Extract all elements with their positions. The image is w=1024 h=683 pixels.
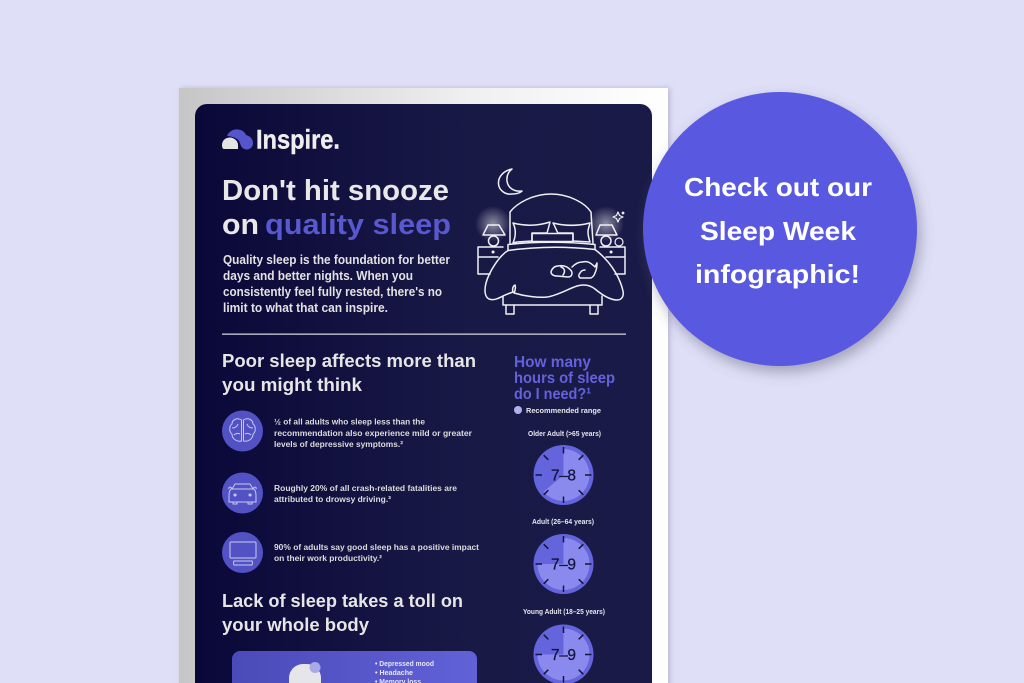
right pillow (553, 223, 590, 242)
divider (222, 334, 626, 335)
stat text: attributed to drowsy driving.³ (274, 494, 391, 504)
lamp glow left (475, 206, 511, 242)
icon: car (222, 472, 263, 514)
legend: Recommended range (526, 406, 601, 415)
clock: young adult: 7–9 (551, 647, 576, 664)
callout circle (643, 92, 917, 366)
car headlights (235, 494, 250, 496)
clock: young adult (523, 607, 606, 683)
stat: work productivity (222, 532, 479, 573)
clock: young adult: Young Adult (18–25 years) (523, 607, 606, 616)
heading: how many hours: do I need?¹ (514, 386, 591, 403)
stat text: 90% of adults say good sleep has a positive impact (274, 542, 479, 552)
stat text: Roughly 20% of all crash-related fatalities are (274, 483, 457, 493)
intro text: Quality sleep is the foundation for better (223, 253, 450, 267)
dog head (551, 266, 572, 277)
lamp right (596, 225, 617, 235)
knobs (493, 250, 611, 254)
stat text: ½ of all adults who sleep less than the (274, 416, 425, 426)
bed legs (506, 305, 598, 314)
clock: older adult (528, 429, 602, 505)
intro text (223, 253, 450, 315)
effects list (375, 659, 434, 683)
heading: how many hours: How many (514, 354, 591, 371)
effects list: • Depressed mood (375, 659, 434, 668)
highlight dot (310, 662, 320, 673)
title: on (222, 209, 259, 241)
title (222, 175, 451, 241)
intro text: consistently feel fully rested, there's no (223, 285, 442, 299)
alarm clock (615, 238, 623, 246)
nightstand right (600, 247, 625, 274)
intro text: days and better nights. When you (223, 269, 413, 283)
heading: lack of sleep (222, 590, 463, 635)
stat: drowsy driving (222, 472, 457, 514)
logo (222, 124, 340, 154)
heading: how many hours (514, 354, 615, 403)
stars (613, 212, 624, 222)
icon: cloud logo (222, 129, 253, 150)
paper sheet (179, 88, 668, 683)
callout text (684, 172, 872, 289)
clock: older adult: 7–8 (551, 468, 576, 484)
callout text: infographic! (695, 259, 860, 289)
callout text: Check out our (684, 172, 872, 202)
center pillow (532, 234, 573, 242)
blanket (485, 250, 623, 300)
intro text: limit to what that can inspire. (223, 301, 388, 315)
clock: adult: Adult (26–64 years) (532, 517, 595, 526)
heading: lack of sleep: your whole body (222, 614, 370, 635)
left pillow (513, 222, 550, 243)
heading: lack of sleep: Lack of sleep takes a toll on (222, 590, 463, 611)
clock: adult (532, 517, 595, 594)
title: Don't hit snooze (222, 175, 449, 207)
stat text: levels of depressive symptoms.² (274, 439, 403, 449)
icon: brain (222, 410, 263, 452)
heading: how many hours: hours of sleep (514, 370, 615, 387)
bed frame (503, 296, 602, 305)
lamp base right (601, 236, 611, 246)
mattress band (508, 242, 595, 250)
effects list: • Headache (375, 668, 413, 677)
stat text: on their work productivity.² (274, 553, 382, 563)
body figure head (289, 664, 321, 683)
icon: monitor (222, 532, 263, 573)
illustration: bed at night (475, 169, 625, 314)
clock: older adult: Older Adult (>65 years) (528, 429, 602, 438)
stat text (274, 542, 479, 563)
stat text (274, 416, 473, 449)
dog body (572, 262, 597, 278)
clock: adult: 7–9 (551, 556, 576, 574)
stat: depression (222, 410, 473, 452)
callout text: Sleep Week (700, 216, 857, 246)
stat text: recommendation also experience mild or greater (274, 428, 473, 438)
lamp left (483, 225, 505, 235)
icon: moon (498, 169, 522, 194)
lamp glow right (588, 206, 624, 242)
nightstand left (478, 247, 503, 274)
stat text (274, 483, 457, 504)
lamp base left (488, 236, 498, 246)
heading: poor sleep (222, 350, 476, 395)
heading: poor sleep: Poor sleep affects more than (222, 350, 476, 371)
logo wordmark: Inspire. (256, 124, 340, 154)
body effects card (232, 651, 477, 683)
title: quality sleep (265, 209, 451, 241)
dark infographic panel (195, 104, 652, 683)
headboard (510, 194, 593, 243)
heading: poor sleep: you might think (222, 374, 363, 395)
